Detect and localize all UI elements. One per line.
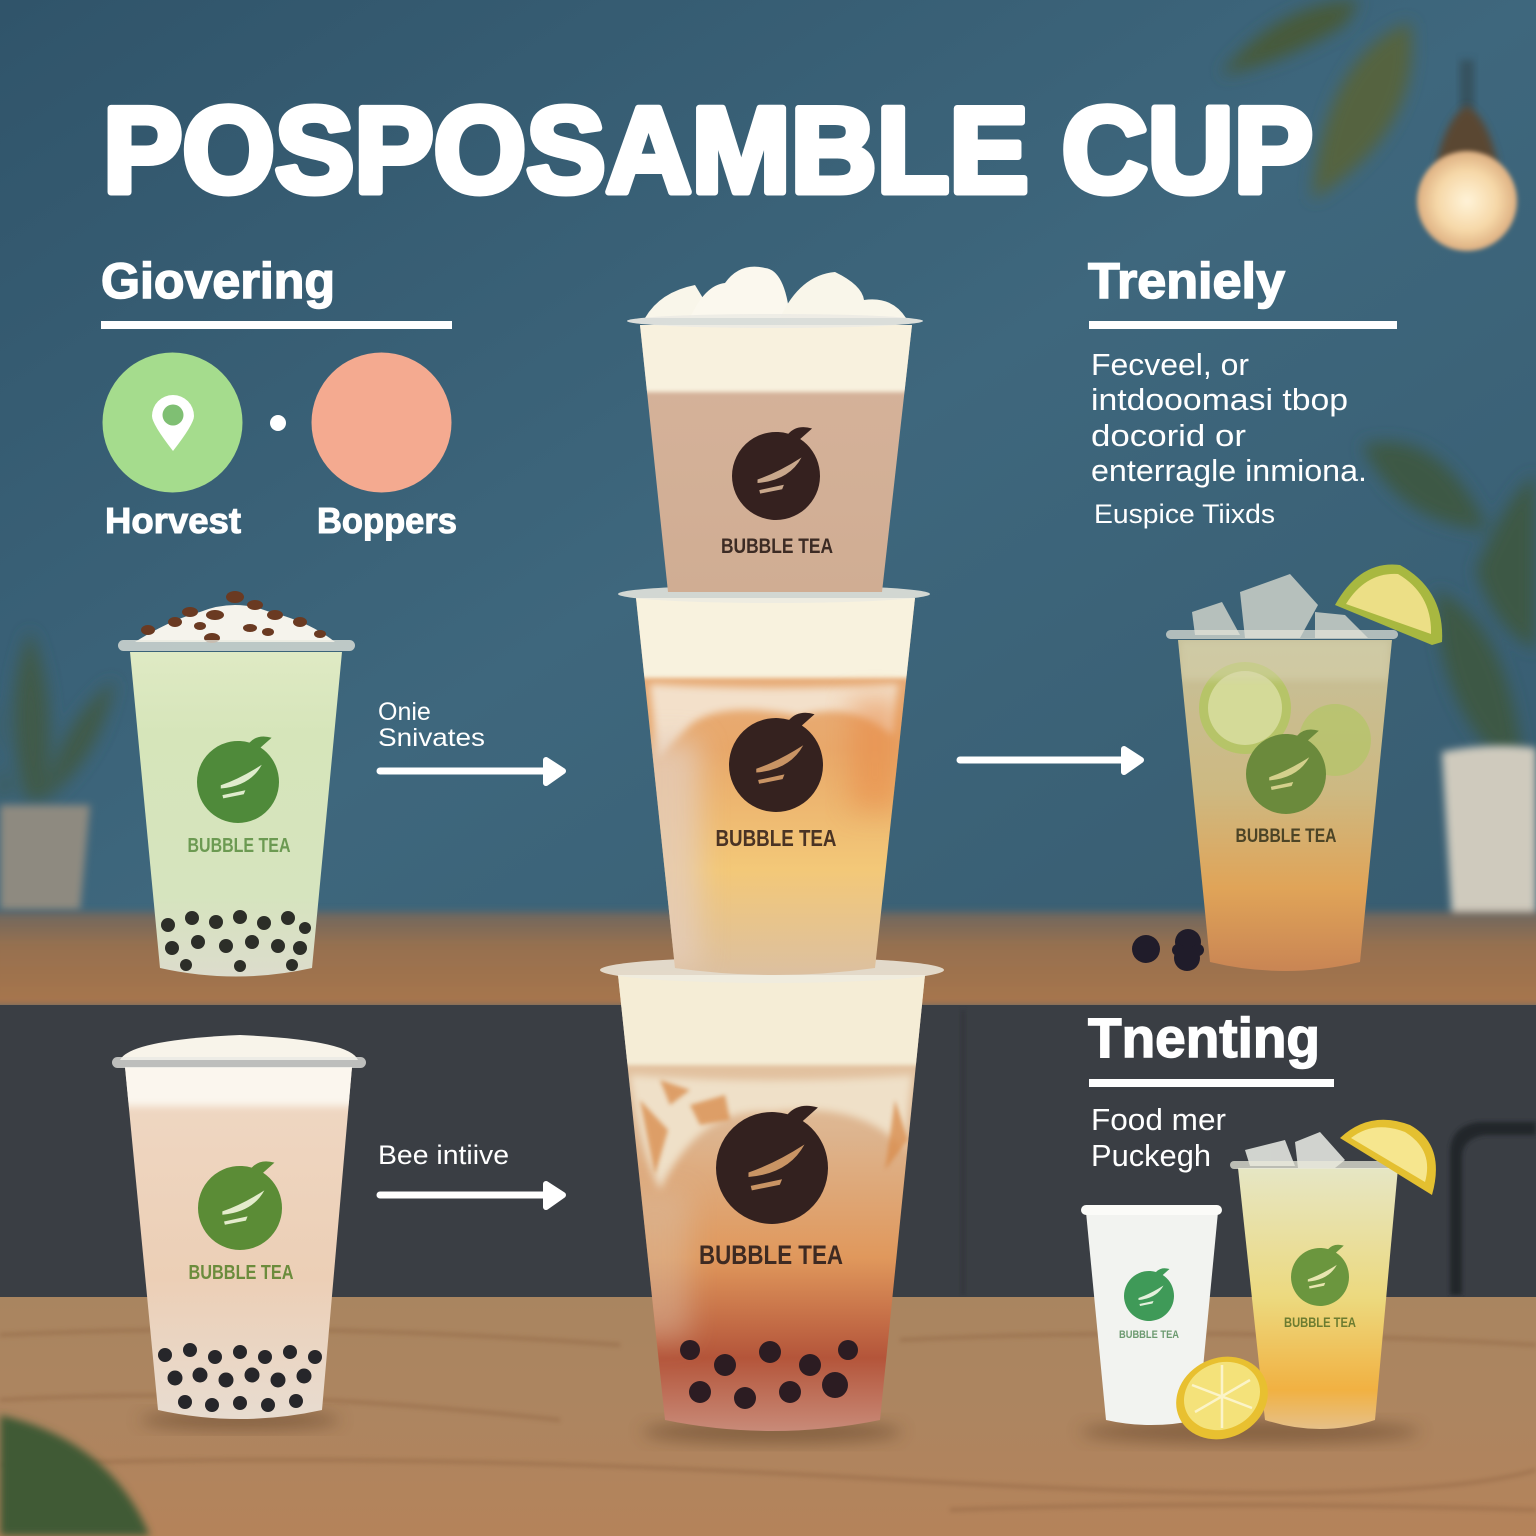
panel: treniely [1088,253,1397,529]
title: POSPOSAMBLE CUP [103,82,1313,218]
label: bubble tea: BUBBLE TEA [1236,826,1337,847]
label: bubble tea: BUBBLE TEA [721,535,833,558]
icon: peach circle [312,352,452,492]
text block: food mer puckegh: Food mer [1091,1102,1226,1137]
text: euspice tiixds: Euspice Tiixds [1094,499,1275,529]
label and arrow: onie snivates: Snivates [378,724,485,752]
cup: center middle [618,585,930,975]
arrow: center to right [960,749,1141,772]
label and arrow: bee intiive [378,1140,563,1207]
label: bubble tea: BUBBLE TEA [188,835,290,857]
label: bubble tea: BUBBLE TEA [716,825,836,851]
label: bubble tea: BUBBLE TEA [1284,1314,1356,1330]
label: bubble tea: BUBBLE TEA [188,1262,294,1284]
garnish: lemon wedge [1340,1120,1436,1195]
background: blurred leaf bottom left [0,1415,150,1536]
cup: center bottom large [600,957,944,1431]
text block: treniely description: enterragle inmiona. [1091,453,1367,488]
label and arrow: bee intiive: Bee intiive [378,1140,509,1170]
icon: green circle with location pin [102,352,242,492]
logo: dark [716,1106,828,1224]
topping: whipped cream [645,267,906,318]
cup: white paper cup [1081,1205,1222,1425]
label: bubble tea: BUBBLE TEA [1119,1329,1179,1341]
background: dark lower wall panels [0,1005,1536,1300]
cup: center top [627,267,923,592]
text block: food mer puckegh: Puckegh [1091,1138,1211,1173]
text block: treniely description: docorid or [1091,418,1246,453]
panel: giovering [101,253,457,541]
text block: treniely description: intdooomasi tbop [1091,382,1348,417]
garnish: lime wedge [1335,564,1442,645]
background: wooden shelf [0,912,1536,1007]
background: pendant lamp [1417,60,1517,251]
background: cafe wall [0,0,1536,1000]
label and arrow: onie snivates: Onie [378,698,431,726]
logo: green [198,1161,282,1250]
cup: iced lime tea [1166,564,1442,971]
background: plant right with pot [1362,442,1536,920]
background: plant left with pot [0,630,115,910]
heading: tnenting: Tnenting [1088,1006,1320,1069]
cup: lemonade glass [1230,1120,1436,1429]
logo: green [1246,730,1326,814]
cup: matcha with chocolate topping [118,591,355,976]
logo: dark [732,427,820,520]
logo: green [197,736,279,823]
logo: green [1124,1268,1174,1321]
cup: milk tea with foam [110,1035,370,1419]
text block: treniely description: Fecveel, or [1091,347,1249,382]
label: horvest: Horvest [105,500,241,541]
garnish: lemon slice [1162,1342,1282,1454]
heading: giovering: Giovering [101,253,335,309]
heading: treniely: Treniely [1088,253,1285,309]
label and arrow: onie snivates [378,698,563,783]
logo: green [1291,1245,1349,1306]
logo: dark [729,713,823,812]
background: wooden table [0,1297,1536,1536]
background: blurred leaves top right [1220,0,1412,200]
label: boppers: Boppers [317,500,457,541]
label: bubble tea: BUBBLE TEA [699,1240,843,1270]
garnish: berries on shelf [1132,929,1204,971]
